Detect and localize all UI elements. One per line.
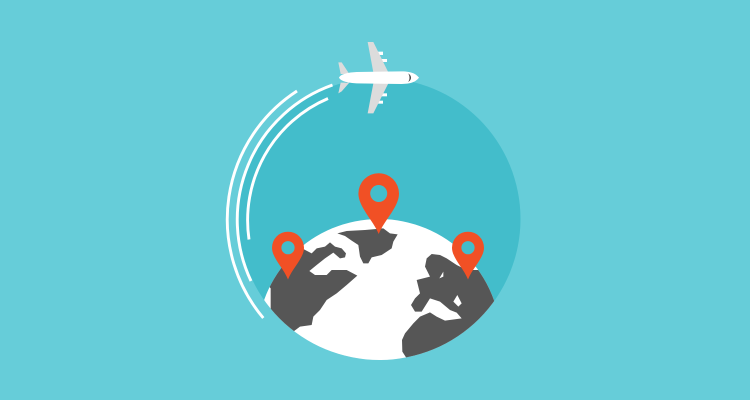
fuselage <box>339 71 419 84</box>
wings <box>368 42 388 113</box>
airplane <box>338 42 419 113</box>
land: left <box>267 242 357 332</box>
flight path arcs <box>227 85 332 318</box>
land: top <box>337 228 398 263</box>
large darker circle <box>238 78 520 360</box>
continents <box>270 228 494 358</box>
tail <box>338 62 349 93</box>
pin: left <box>272 232 304 280</box>
pin: center <box>358 173 399 234</box>
engines <box>377 52 387 104</box>
cockpit window <box>408 73 411 82</box>
land: right <box>402 254 494 358</box>
pin: right <box>452 232 484 280</box>
illustration: plane circling the globe <box>226 42 520 360</box>
globe <box>264 219 494 360</box>
